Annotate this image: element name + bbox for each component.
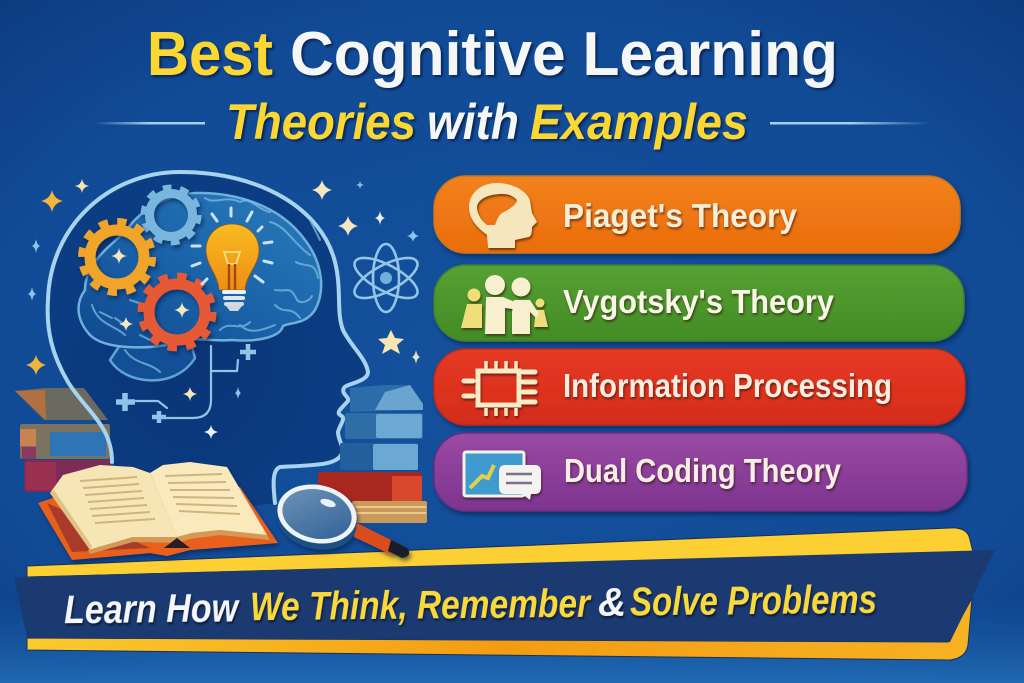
banner text: Solve Problems bbox=[630, 578, 877, 624]
icon: light bulb bbox=[192, 208, 272, 311]
banner bbox=[14, 528, 995, 660]
title bbox=[147, 20, 838, 150]
icon: group of people bbox=[461, 275, 548, 334]
icon: orange gear bbox=[82, 222, 152, 292]
icon: chart and speech bubble bbox=[464, 452, 541, 500]
title: Best bbox=[147, 20, 273, 89]
icon: red gear bbox=[142, 277, 212, 347]
icon: microchip bbox=[464, 361, 535, 416]
title: Examples bbox=[530, 94, 748, 150]
sparkle stars bbox=[26, 179, 420, 439]
label: Dual Coding Theory: Dual Coding Theory bbox=[564, 452, 842, 489]
label: Piaget's Theory: Piaget's Theory bbox=[563, 197, 798, 234]
illustration: left book stack bbox=[15, 388, 112, 492]
illustration: right book stack bbox=[318, 385, 427, 523]
title: with bbox=[427, 94, 519, 150]
banner text: Learn How bbox=[64, 586, 241, 632]
illustration: brain bbox=[79, 193, 321, 380]
label: Vygotsky's Theory: Vygotsky's Theory bbox=[563, 283, 835, 320]
banner text: We Think, Remember bbox=[250, 582, 592, 629]
panel: purple Dual Coding Theory bbox=[434, 433, 967, 511]
icon: blue gear bbox=[144, 188, 198, 242]
banner: orange bottom band bbox=[27, 598, 972, 660]
panel: red Information Processing bbox=[434, 349, 965, 425]
title: Cognitive Learning bbox=[290, 20, 838, 89]
panel: green Vygotsky's Theory bbox=[434, 265, 964, 341]
illustration: head outline bbox=[48, 172, 368, 503]
illustration: magnifying glass bbox=[272, 477, 409, 558]
panel: orange Piaget's Theory bbox=[434, 176, 960, 253]
label: Information Processing: Information Processing bbox=[563, 367, 892, 404]
illustration: open book bbox=[38, 462, 278, 560]
icon: head with brain bbox=[469, 183, 537, 248]
title: Theories bbox=[226, 94, 416, 150]
icon: atom bbox=[349, 244, 423, 312]
banner: yellow top band bbox=[27, 528, 973, 577]
illustration: head fill bbox=[48, 172, 368, 520]
banner text: & bbox=[598, 580, 626, 625]
banner text bbox=[64, 578, 877, 632]
illustration: circuit lines bbox=[116, 344, 256, 423]
banner: navy ribbon bbox=[14, 550, 995, 642]
